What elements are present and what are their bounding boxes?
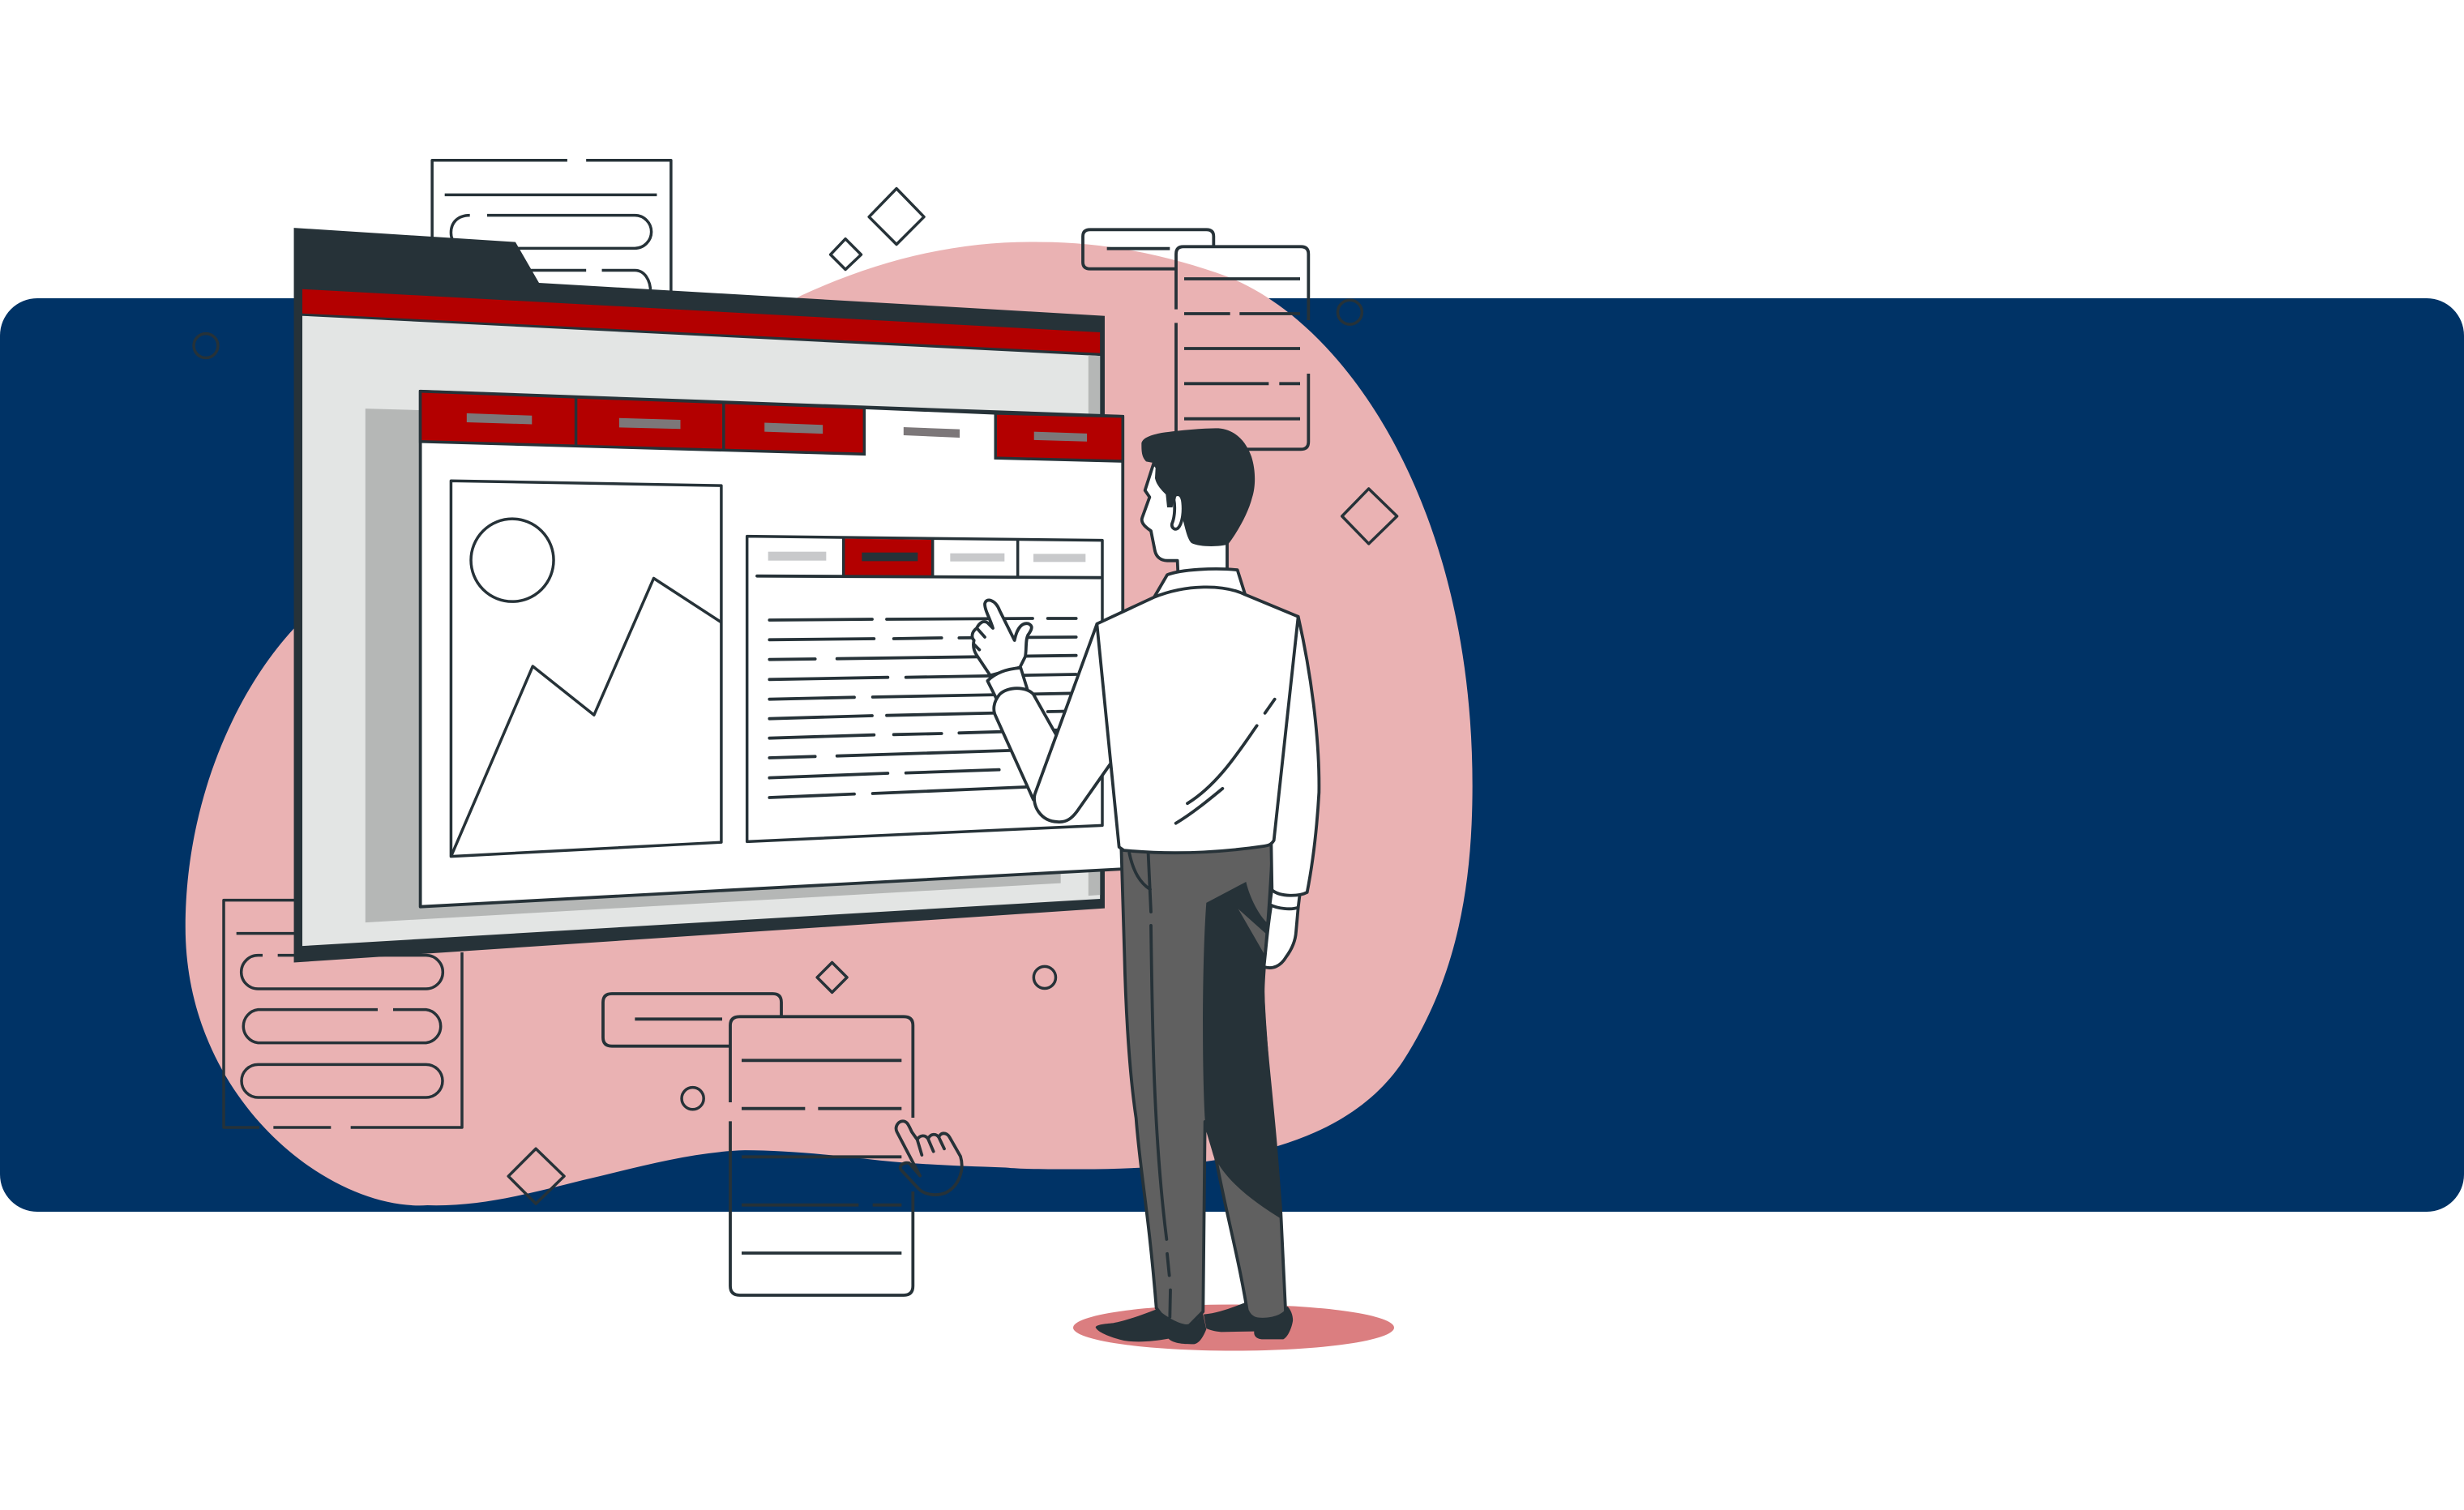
active red tab xyxy=(844,539,933,576)
shirt creases xyxy=(1176,699,1275,823)
decorative diamonds xyxy=(508,189,1397,1204)
trouser shading xyxy=(1203,882,1282,1219)
hair xyxy=(1141,428,1255,546)
window red title bar xyxy=(302,289,1100,353)
decorative circles xyxy=(194,300,1362,1110)
browser window xyxy=(294,228,1123,963)
hanging hand xyxy=(1264,905,1298,968)
shirt collar xyxy=(1153,569,1246,598)
right sleeve xyxy=(1271,617,1319,896)
ear xyxy=(1172,494,1183,529)
tab dividers xyxy=(576,397,996,450)
floating document: left list with pills xyxy=(224,900,462,1127)
pointing hand xyxy=(972,600,1032,675)
right shade strip xyxy=(1089,355,1100,896)
shirt cuff xyxy=(1270,888,1300,909)
pointing arm and hand xyxy=(972,600,1119,822)
text lines xyxy=(769,618,1076,798)
tab label bars xyxy=(467,413,1087,442)
image card with sun and mountains xyxy=(451,481,721,857)
icon: pointer hand cursor xyxy=(896,1121,962,1195)
cuff xyxy=(987,668,1027,699)
floating document: top left list xyxy=(432,160,671,298)
face and neck xyxy=(1142,464,1227,573)
content card with tabs and text lines xyxy=(747,537,1102,841)
shirt torso xyxy=(1097,587,1298,853)
floating cards: top right xyxy=(1083,229,1308,449)
upper arm xyxy=(1034,624,1119,822)
panel drop shadow xyxy=(366,409,1061,922)
man standing with back turned xyxy=(972,428,1319,1344)
forearm xyxy=(994,688,1058,800)
tab label bars xyxy=(768,552,1085,562)
trouser crease and pocket xyxy=(1129,853,1170,1317)
last red tab xyxy=(995,413,1123,461)
red navigation tabs xyxy=(421,391,864,454)
window frame with folder tab xyxy=(294,228,1105,963)
collar and right sleeve xyxy=(1153,569,1319,896)
floating cards: bottom centre xyxy=(603,994,962,1295)
ground shadow ellipse xyxy=(1073,1305,1394,1350)
head xyxy=(1141,428,1255,573)
trousers xyxy=(1121,843,1300,1326)
navy background band xyxy=(0,298,2464,1212)
pink blob backdrop xyxy=(186,242,1473,1205)
white content panel xyxy=(421,391,1123,907)
window light page area xyxy=(302,316,1100,946)
shoes xyxy=(1096,1303,1293,1344)
